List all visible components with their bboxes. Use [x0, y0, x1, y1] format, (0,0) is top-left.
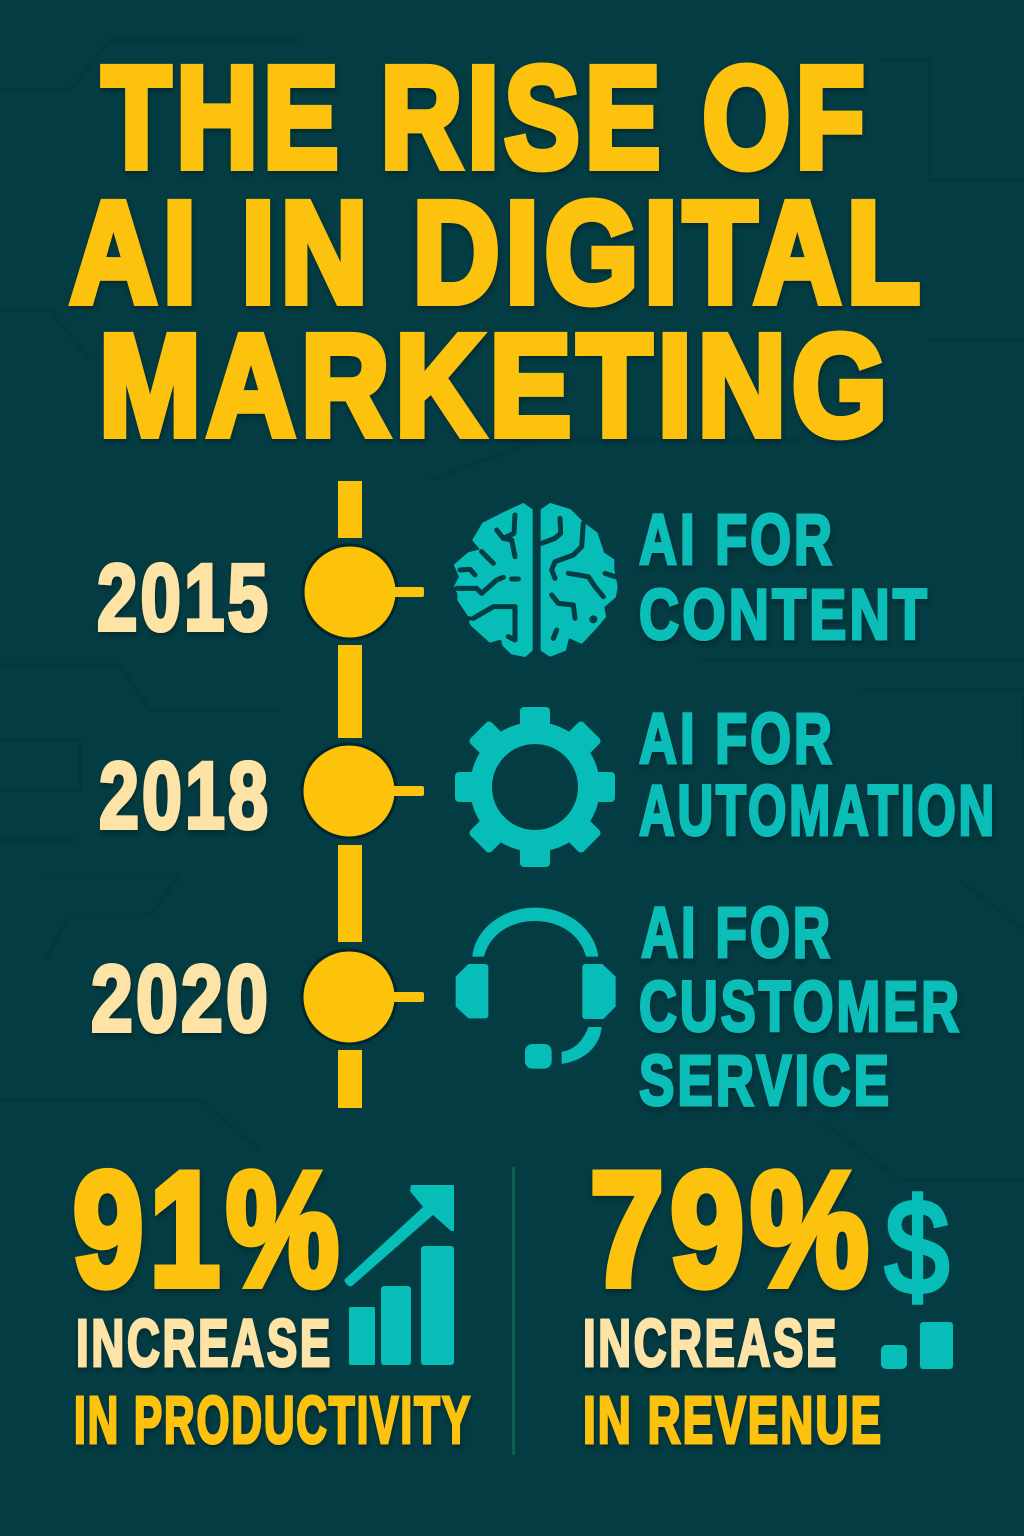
- label: AI for customer service: SERVICE: [639, 1042, 892, 1121]
- icon: brain: [455, 504, 617, 656]
- year labels: 2018: [99, 743, 271, 849]
- label: AI for automation: [639, 700, 997, 851]
- stat: 91% productivity: IN PRODUCTIVITY: [74, 1383, 472, 1458]
- icon: headset: [456, 908, 616, 1069]
- icon: gear: [455, 707, 615, 867]
- stat: 91% productivity: 91%: [73, 1139, 345, 1320]
- stat: 91% productivity: [73, 1139, 472, 1458]
- divider: [512, 1167, 515, 1455]
- stat: 79% revenue: 79%: [590, 1139, 875, 1320]
- title: [70, 37, 926, 466]
- year labels: 2020: [91, 946, 271, 1052]
- stat: 79% revenue: [583, 1139, 883, 1458]
- stat: 91% productivity: INCREASE: [76, 1306, 333, 1381]
- label: AI for automation: AI FOR: [639, 700, 835, 779]
- icon: dollar with bars: [881, 1173, 953, 1369]
- label: AI for content: CONTENT: [639, 576, 930, 655]
- year labels: 2015: [97, 545, 271, 651]
- label: AI for customer service: AI FOR: [641, 894, 833, 973]
- label: AI for content: AI FOR: [639, 501, 835, 580]
- stat: 79% revenue: INCREASE: [583, 1306, 839, 1381]
- label: AI for customer service: [639, 894, 962, 1121]
- icon: dollar with bars: $: [885, 1173, 949, 1322]
- title: MARKETING: [99, 305, 893, 466]
- timeline: [302, 481, 424, 1108]
- icon: growth chart with arrow: [344, 1185, 454, 1365]
- stat: 79% revenue: IN REVENUE: [583, 1383, 883, 1458]
- year labels: [91, 545, 271, 1052]
- label: AI for content: [639, 501, 930, 655]
